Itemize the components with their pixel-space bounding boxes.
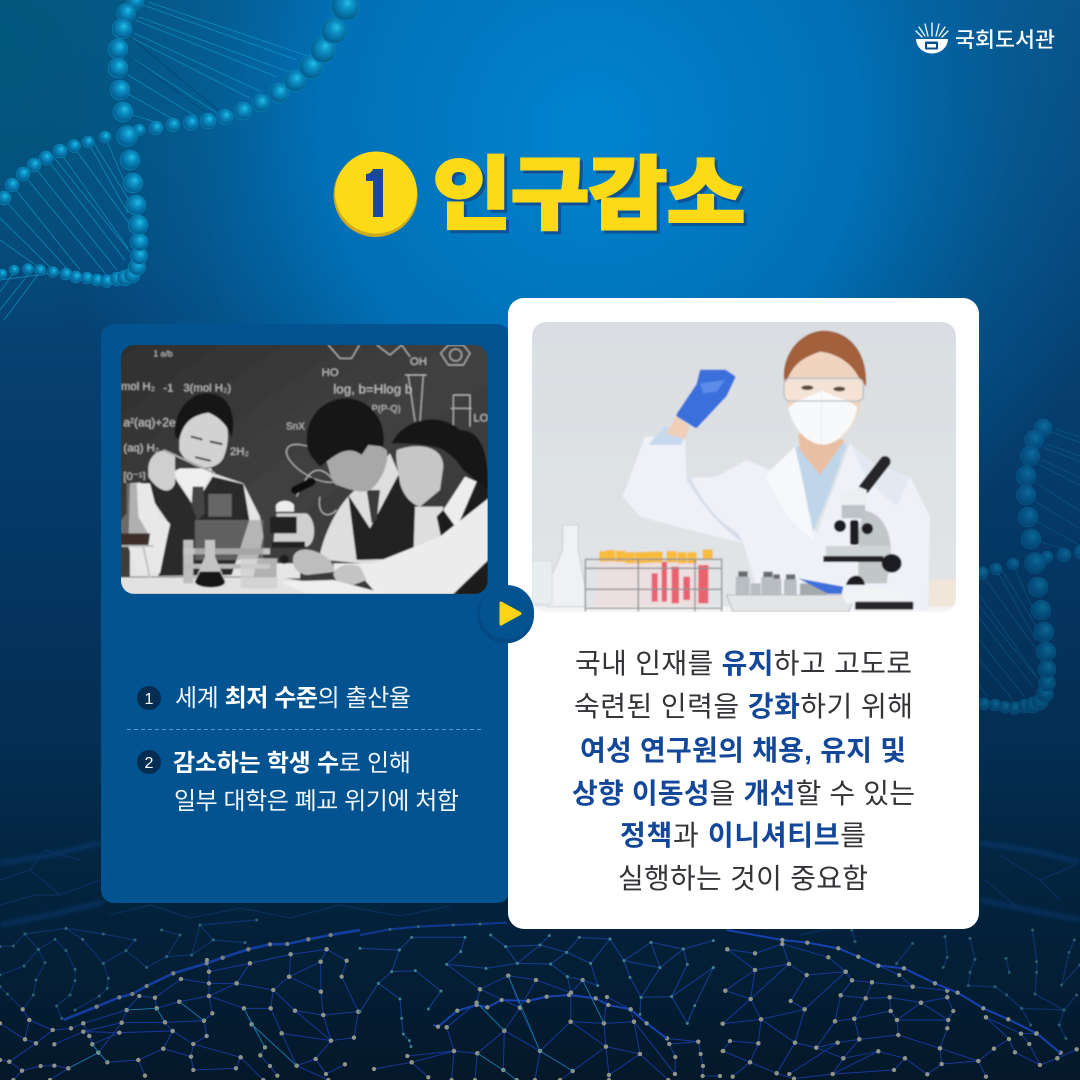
- mesh top band: [0, 843, 1080, 935]
- chalk formulas: -1: [163, 383, 173, 395]
- item 2 text: 감소하는 학생 수로 인해: [173, 750, 411, 777]
- photo: researcher in lab: [530, 320, 960, 620]
- heading text: 인구감소: [433, 150, 745, 239]
- microscope: [270, 482, 314, 578]
- body text: 국내 인재를 유지하고 고도로: [575, 648, 912, 679]
- chalk formulas: log, b=Hlog b: [333, 381, 412, 396]
- item 2 text: 일부 대학은 폐교 위기에 처함: [174, 788, 459, 815]
- icon: book with sunburst: [916, 23, 948, 54]
- dashed divider: [127, 728, 483, 730]
- vials and tray: [727, 571, 855, 613]
- table: [121, 576, 307, 594]
- network mesh bottom: [0, 843, 1080, 1080]
- mesh left section: [0, 920, 360, 1080]
- body text: 실행하는 것이 중요함: [618, 863, 868, 894]
- mesh left faint links: [0, 920, 257, 1018]
- mesh right faint links: [852, 930, 1080, 1038]
- chalk formulas: SnX: [286, 421, 305, 432]
- chalk formulas: OH: [410, 356, 427, 368]
- chalk formulas: [0⁻¹]: [123, 471, 146, 483]
- mesh left curve band: [63, 930, 360, 1020]
- body text: 숙련된 인력을 강화하기 위해: [574, 691, 913, 722]
- logo wordmark: 국회도서관: [955, 29, 1055, 52]
- body text: [572, 648, 915, 894]
- photo: students in lab (grayscale): [120, 340, 490, 600]
- arrow button: [477, 585, 534, 644]
- chalk formulas: [121, 349, 489, 483]
- bullet 1: [137, 686, 161, 710]
- test tube rack: [585, 549, 722, 612]
- mesh right section: [723, 930, 1080, 1079]
- list item 2: [137, 750, 459, 815]
- panel: right white: [508, 298, 979, 929]
- chalk formulas: (aq) H₂: [123, 443, 159, 455]
- chalk formulas: 1 a/b: [153, 349, 173, 359]
- microscope: [823, 462, 913, 610]
- right student: [333, 420, 488, 594]
- mesh middle dome links: [374, 976, 720, 1080]
- item 1 text: 세계 최저 수준의 출산율: [175, 685, 411, 712]
- title: [334, 150, 745, 239]
- lab glassware: [183, 494, 277, 588]
- flask and beaker: [532, 525, 585, 607]
- researcher: [623, 331, 930, 610]
- bullet 1: 1: [145, 691, 154, 708]
- boy student: [293, 398, 443, 575]
- mesh middle curve band: [433, 995, 667, 1038]
- body text: 정책과 이니셔티브를: [620, 820, 866, 851]
- chalk formulas: HO: [322, 367, 339, 379]
- chalk formulas: 2H₂: [230, 446, 249, 458]
- body text: 상향 이동성을 개선할 수 있는: [572, 778, 915, 809]
- mesh left bright links: [0, 949, 358, 1080]
- number badge: [334, 152, 418, 237]
- mesh middle section: [360, 923, 720, 1080]
- bullet 2: 2: [145, 755, 154, 772]
- mesh middle upper links: [360, 935, 713, 1047]
- body text: 여성 연구원의 채용, 유지 및: [580, 735, 906, 766]
- chalk formulas: P(P-Q): [372, 404, 401, 414]
- mesh right curve band: [727, 930, 1060, 1053]
- bullet 2: [137, 750, 161, 774]
- chalk formulas: a²(aq)+2e: [123, 416, 176, 430]
- list item 1: [137, 685, 411, 712]
- chalk formulas: mol H₂: [121, 381, 155, 393]
- publisher logo: 국회도서관: [916, 23, 1055, 54]
- DNA helix right: [905, 419, 1080, 747]
- panel: left blue: [101, 324, 510, 903]
- item 2 text: [173, 750, 459, 815]
- chalk formulas: 3(mol H₂): [183, 383, 231, 395]
- chalk formulas: LO: [473, 413, 489, 425]
- flask left: [121, 483, 153, 587]
- DNA helix top left: [0, 0, 359, 320]
- mesh right bright links: [723, 944, 1077, 1079]
- left student: [128, 393, 263, 577]
